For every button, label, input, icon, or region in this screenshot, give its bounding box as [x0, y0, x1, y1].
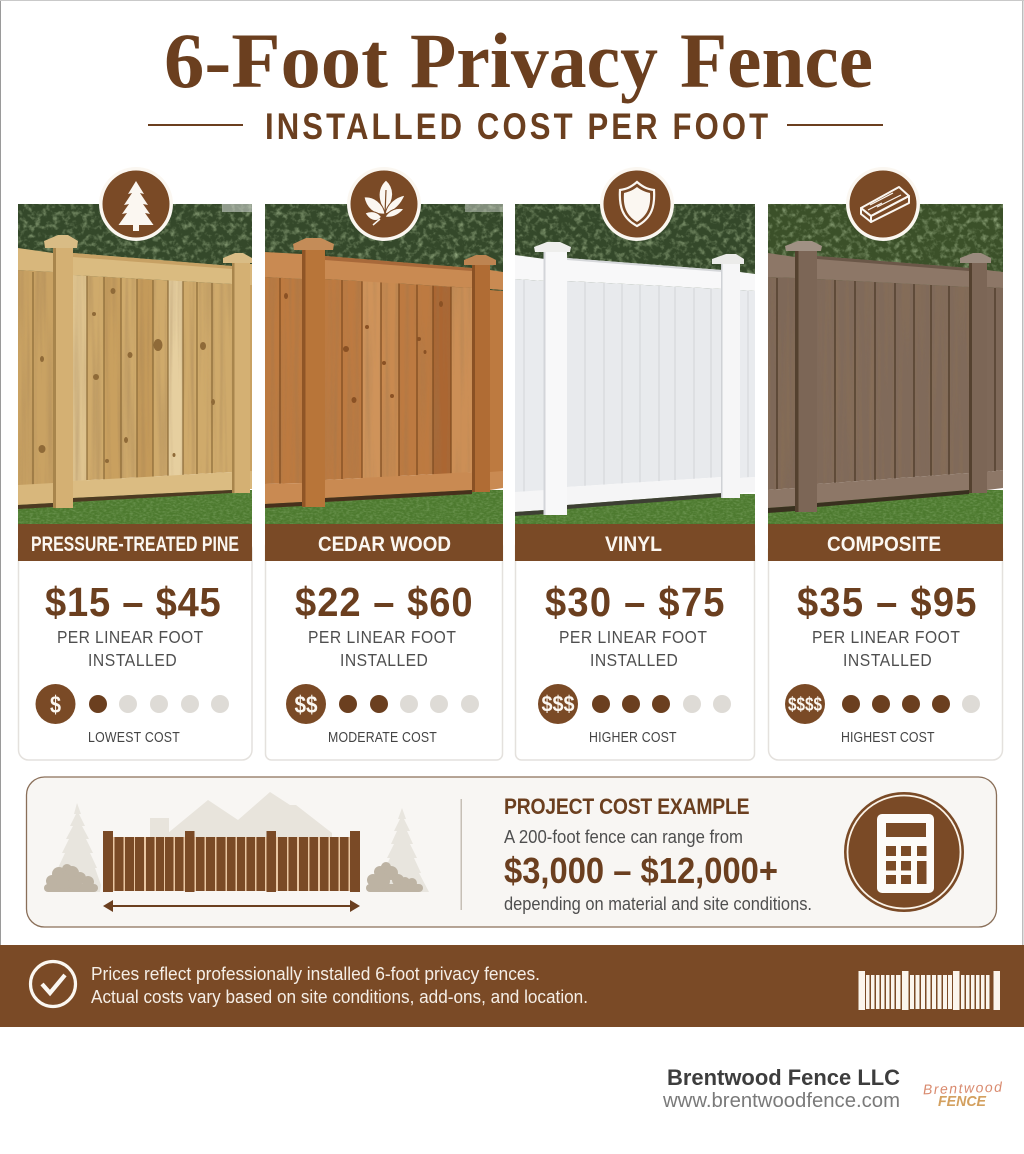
price unit	[559, 627, 707, 670]
material label band: CEDAR WOOD	[318, 533, 451, 556]
cost rating dots	[286, 684, 479, 724]
right tree	[366, 808, 429, 892]
panel: composite	[768, 167, 1003, 760]
icon: check mark	[30, 962, 76, 1006]
cost tier label: HIGHEST COST	[841, 729, 935, 745]
price unit: INSTALLED	[88, 650, 177, 670]
material label band: VINYL	[605, 533, 662, 556]
price range: $35 – $95	[797, 580, 976, 625]
logo: Brentwood Fence: Brentwood	[923, 1079, 1003, 1097]
price range: $22 – $60	[295, 580, 473, 625]
title: Privacy	[410, 17, 658, 104]
cost tier label: LOWEST COST	[88, 729, 180, 745]
photo: composite fence	[768, 204, 1003, 524]
price range: $30 – $75	[545, 580, 724, 625]
project heading: PROJECT COST EXAMPLE	[504, 795, 750, 819]
cost rating dots	[785, 684, 980, 724]
brown fence	[103, 831, 360, 892]
cost rating dots	[538, 684, 731, 724]
icon: shield	[600, 167, 674, 241]
project price range: $3,000 – $12,000+	[504, 850, 778, 891]
material label band	[18, 524, 252, 561]
card outline	[516, 540, 754, 760]
panel: cedar wood	[265, 167, 503, 760]
photo: cedar fence	[265, 204, 503, 524]
company website: www.brentwoodfence.com	[662, 1090, 900, 1112]
footer band	[0, 945, 1024, 1027]
subtitle: INSTALLED COST PER FOOT	[265, 107, 768, 148]
cost rating dots: $$$$	[788, 694, 822, 716]
card outline	[18, 540, 252, 760]
left tree	[44, 803, 101, 892]
panel: vinyl	[515, 167, 755, 760]
price unit: PER LINEAR FOOT	[559, 627, 707, 647]
material label band	[265, 524, 503, 561]
price unit: INSTALLED	[590, 650, 678, 670]
disclaimer text	[91, 964, 588, 1007]
price unit	[308, 627, 456, 670]
cost rating dots: $$$	[542, 692, 574, 716]
disclaimer text: Actual costs vary based on site conditions, add-ons, and location.	[91, 987, 588, 1007]
price unit: INSTALLED	[340, 650, 428, 670]
logo: Brentwood Fence	[923, 1079, 1003, 1110]
cost tier label: MODERATE COST	[328, 729, 437, 745]
material label band: PRESSURE-TREATED PINE	[31, 533, 239, 556]
material label band: COMPOSITE	[827, 533, 941, 556]
price unit	[812, 627, 960, 670]
material label band	[768, 524, 1003, 561]
icon: pine tree	[99, 167, 173, 241]
house silhouette	[150, 792, 332, 838]
price unit	[57, 627, 203, 670]
price unit: PER LINEAR FOOT	[812, 627, 960, 647]
illustration: fence with house and trees	[44, 792, 429, 912]
project note: depending on material and site conditions.	[504, 894, 812, 914]
project intro text: A 200-foot fence can range from	[504, 827, 743, 847]
cost rating dots: $	[50, 692, 62, 718]
card outline	[768, 540, 1002, 760]
icon: leaf	[347, 167, 421, 241]
title: Fence	[680, 17, 873, 104]
photo: pine fence	[18, 204, 252, 524]
price range: $15 – $45	[45, 580, 221, 625]
dimension arrow	[103, 900, 360, 912]
title: 6-Foot	[164, 17, 388, 104]
icon: white fence	[858, 971, 1000, 1010]
material label band	[515, 524, 755, 561]
panel: pressure-treated pine	[18, 167, 252, 760]
company name: Brentwood Fence LLC	[667, 1065, 900, 1090]
cost rating dots	[36, 684, 229, 724]
photo: vinyl fence	[515, 204, 755, 524]
icon: composite board	[846, 167, 920, 241]
price unit: PER LINEAR FOOT	[57, 627, 203, 647]
price unit: INSTALLED	[843, 650, 932, 670]
icon: calculator	[844, 792, 964, 912]
cost rating dots: $$	[294, 692, 318, 718]
title	[164, 17, 873, 104]
disclaimer text: Prices reflect professionally installed 6-foot privacy fences.	[91, 964, 540, 984]
card outline	[266, 540, 502, 760]
panel: project cost example	[26, 777, 996, 927]
price unit: PER LINEAR FOOT	[308, 627, 456, 647]
logo: Brentwood Fence: FENCE	[938, 1093, 987, 1110]
cost tier label: HIGHER COST	[589, 729, 677, 745]
